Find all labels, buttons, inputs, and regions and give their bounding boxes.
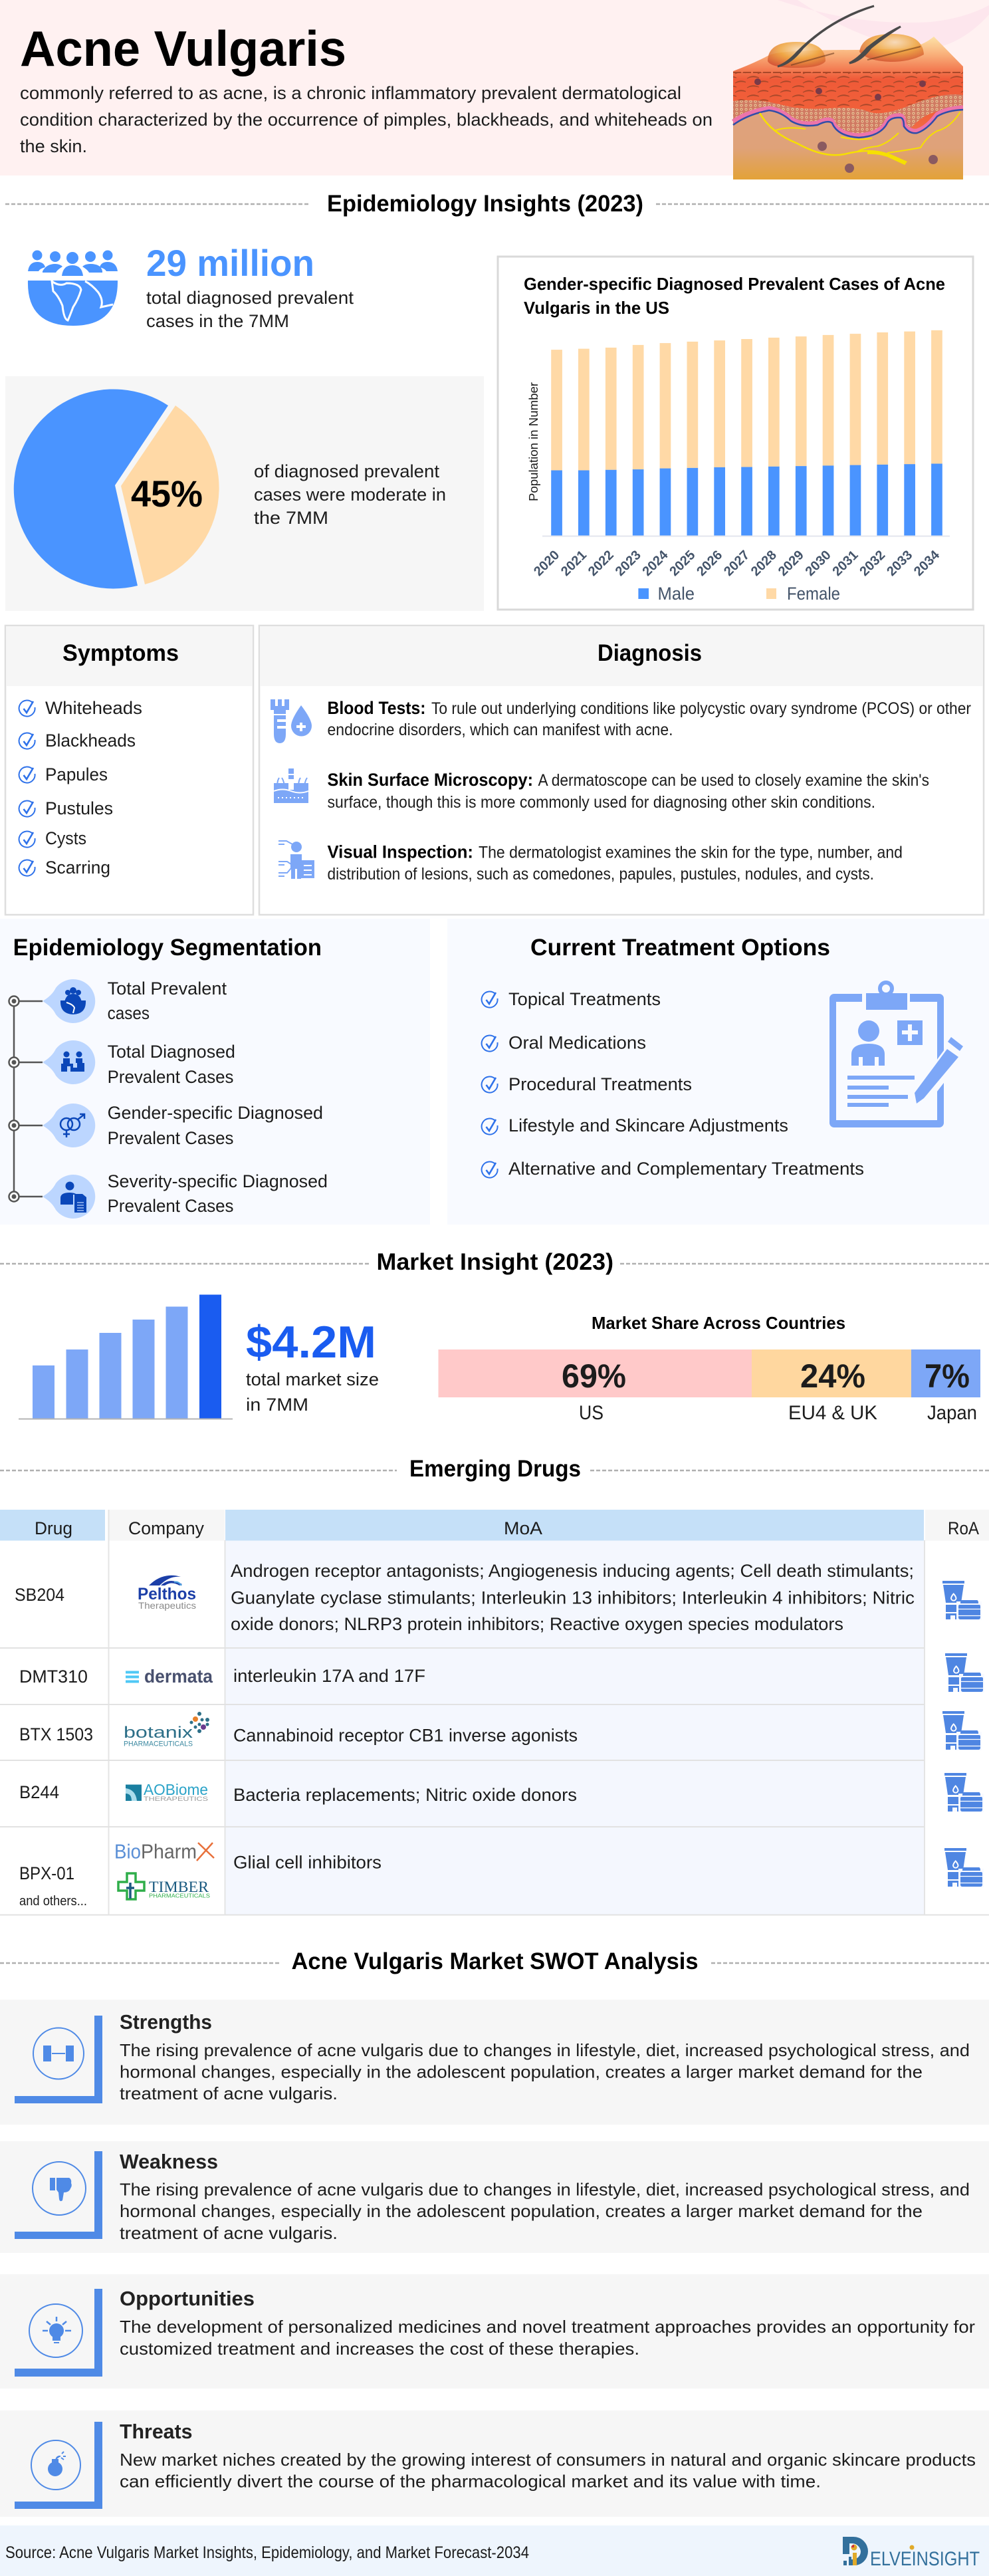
title: Acne Vulgaris [20,21,346,76]
chart: market share across countries: Market Share Across Countries [592,1313,845,1333]
segment: total diagnosed prevalent cases: Total Diagnosed [108,1042,235,1062]
segment: US [439,1349,752,1424]
row: B244 [19,1773,984,1812]
treatment list: Lifestyle and Skincare Adjustments [508,1115,788,1135]
icon: thumbs down [33,2162,86,2215]
table header [0,1510,989,1541]
segment: total prevalent cases [43,979,227,1023]
source note: Source: Acne Vulgaris Market Insights, Epidemiology, and Market Forecast-2034 [5,2543,529,2562]
chart title: Gender-specific Diagnosed Prevalent Cases of Acne [524,274,945,294]
heading: Epidemiology Insights (2023): Epidemiology Insights (2023) [327,191,643,217]
threats text: New market niches created by the growing interest of consumers in natural and organic skincare products [120,2450,976,2470]
strengths text [120,2010,970,2103]
row: DMT310: interleukin 17A and 17F [233,1666,425,1686]
logo: Timber Pharmaceuticals: TIMBER [149,1879,209,1895]
visual inspection text: The dermatologist examines the skin for the type, number, and [479,843,903,862]
chart: market growth bars [19,1295,233,1419]
table: emerging drugs [0,1510,989,1915]
heading: Emerging Drugs: Emerging Drugs [409,1456,581,1482]
row: SB204: SB204 [15,1585,64,1605]
x axis years: 2033 [884,548,915,579]
strengths text: Strengths [120,2010,212,2034]
icon: people on globe [28,250,118,326]
row: B244: B244 [19,1782,59,1802]
weakness text: treatment of acne vulgaris. [120,2223,338,2243]
icon: dumbbell [33,2028,84,2079]
panel: current treatment options [447,919,989,1225]
icon: light bulb [29,2304,82,2357]
row: BPX-01: BPX-01 [19,1863,74,1883]
logo: Pelthos Therapeutics: Pelthos [138,1585,196,1603]
stat: market size: in 7MM [246,1395,308,1415]
opportunities text: customized treatment and increases the cost of these therapies. [120,2339,639,2359]
treatment list: Topical Treatments [508,989,661,1009]
stat: market size [246,1317,379,1415]
segment: severity-specific diagnosed prevalent cases: Prevalent Cases [108,1196,234,1216]
pie chart: 45% [131,473,203,515]
segment: US: 69% [562,1357,626,1395]
pie chart [14,389,219,588]
logo: botanix: PHARMACEUTICALS [124,1740,193,1748]
segment: EU4 and UK: 24% [800,1357,865,1395]
treatment list [482,989,864,1179]
x axis years: 2030 [803,548,834,579]
logo: dermata: dermata [144,1666,213,1687]
logo: DelveInsight [843,2537,980,2570]
icon: dermatologist with checklist [278,841,314,879]
timeline connector [9,996,43,1202]
segment: total prevalent cases: cases [108,1003,150,1023]
chart title: Vulgaris in the US [524,298,669,318]
strengths text: treatment of acne vulgaris. [120,2083,338,2103]
row: SB204 [15,1561,982,1634]
opportunities text: Opportunities [120,2287,255,2310]
symptoms list: Whiteheads [45,698,142,718]
symptoms list: Pustules [45,798,113,818]
intro text: commonly referred to as acne, is a chronic inflammatory prevalent dermatological [20,83,681,103]
segment: severity-specific diagnosed prevalent cases [43,1171,328,1219]
panel: diagnosis [259,626,984,915]
intro text: the skin. [20,136,87,156]
stat: 29 million [28,242,354,331]
row: SB204: Guanylate cyclase stimulants; Interleukin 13 inhibitors; Interleukin 4 inhibitors; Nitric [231,1587,915,1607]
segmentation heading: Epidemiology Segmentation [13,935,322,961]
x axis years: 2027 [721,548,752,579]
x axis years: 2025 [667,548,698,579]
y axis label: Population in Number [527,382,540,501]
x axis years: 2020 [531,548,562,579]
visual inspection text: Visual Inspection: [327,842,473,862]
visual inspection text [327,842,903,883]
x axis years: 2021 [558,548,590,579]
footer [0,2525,989,2576]
row: SB204: oxide donors; NLRP3 protein inhibitors; Reactive oxygen species modulators [231,1614,843,1634]
weakness text [120,2150,970,2243]
legend: Male [658,584,695,604]
stat: 29 million: 29 million [146,242,314,284]
weakness text: The rising prevalence of acne vulgaris due to changes in lifestyle, diet, increased psychological stress, and [120,2180,970,2200]
row: SB204: Androgen receptor antagonists; Angiogenesis inducing agents; Cell death stimulants; [231,1561,914,1581]
segment: gender-specific diagnosed prevalent cases [43,1103,323,1148]
symptoms list: Cysts [45,828,86,848]
pie caption [254,461,446,528]
pie caption: of diagnosed prevalent [254,461,439,481]
intro text: condition characterized by the occurrence of pimples, blackheads, and whiteheads on [20,110,713,130]
x axis years: 2023 [613,548,644,579]
row: B244: Bacteria replacements; Nitric oxide donors [233,1785,577,1805]
table header: Drug [35,1518,72,1538]
symptoms list: Scarring [45,858,110,878]
logo: AOBiome Therapeutics: THERAPEUTICS [144,1796,208,1802]
row: BPX-01 [19,1840,984,1909]
segment: total diagnosed prevalent cases [43,1040,235,1087]
logo: Timber Pharmaceuticals [118,1873,210,1899]
heading: Market Insight (2023): Market Insight (2023) [376,1249,613,1275]
segment: gender-specific diagnosed prevalent cases: Prevalent Cases [108,1128,234,1148]
blood tests text [327,698,971,739]
panel: moderate cases pie [5,376,484,611]
x axis years: 2029 [776,548,807,579]
x axis years: 2034 [911,547,943,579]
weakness text: Weakness [120,2150,218,2173]
row: BTX 1503: BTX 1503 [19,1724,93,1744]
logo: Timber Pharmaceuticals: PHARMACEUTICALS [149,1893,210,1899]
blood tests text: endocrine disorders, which can manifest with acne. [327,721,673,739]
panel: opportunities [0,2274,989,2389]
logo: AOBiome Therapeutics: AOBiome [144,1781,208,1798]
segment: US: US [579,1402,604,1424]
x axis years: 2022 [586,548,617,579]
heading: SWOT analysis: Acne Vulgaris Market SWOT Analysis [291,1948,698,1974]
skin surface microscopy text: surface, though this is more commonly used for diagnosing other skin conditions. [327,793,875,812]
row: BTX 1503 [19,1711,982,1750]
logo: botanix [124,1712,209,1748]
symptoms list: Papules [45,764,108,784]
logo: Pelthos Therapeutics [138,1576,196,1611]
segment: EU4 and UK: EU4 & UK [788,1402,877,1424]
x axis years: 2031 [830,548,861,579]
treatment heading: Current Treatment Options [530,935,830,961]
chart title [524,274,945,318]
diagnosis heading: Diagnosis [598,640,702,666]
table header: Company [128,1518,204,1538]
weakness text: hormonal changes, especially in the adolescent population, creates a larger market demand for the [120,2201,923,2221]
logo: botanix: botanix [124,1724,193,1742]
threats text: Threats [120,2420,193,2443]
strengths text: The rising prevalence of acne vulgaris due to changes in lifestyle, diet, increased psychological stress, and [120,2040,970,2060]
row: BPX-01: and others... [19,1894,87,1909]
x axis years: 2026 [694,548,725,579]
illustration: skin cross-section with acne [733,6,963,179]
blood tests text: Blood Tests: [327,698,425,718]
segment: Japan: 7% [925,1357,970,1395]
pie caption: cases were moderate in [254,485,446,505]
segment: Japan: Japan [927,1402,977,1424]
panel: threats [0,2410,989,2517]
symptoms heading: Symptoms [62,640,179,666]
icon: skin microscopy [274,768,308,803]
segment: total prevalent cases: Total Prevalent [108,979,227,998]
x axis years: 2032 [857,548,888,579]
row: DMT310: DMT310 [19,1667,88,1687]
panel: weakness [0,2141,989,2253]
treatment list: Procedural Treatments [508,1074,692,1094]
opportunities text: The development of personalized medicines and novel treatment approaches provides an opportunity for [120,2317,975,2337]
legend: Female [787,584,840,604]
logo: BioPharmX: Pharm [141,1840,197,1863]
stat: 29 million: total diagnosed prevalent [146,288,354,308]
legend [638,584,840,604]
x axis years: 2028 [748,548,780,579]
threats text: can efficiently divert the course of the pharmacological market and its value with time. [120,2472,821,2492]
treatment list: Alternative and Complementary Treatments [508,1159,864,1179]
icon: clipboard with patient and pencil [829,983,964,1127]
symptoms list: Blackheads [45,731,136,751]
skin surface microscopy text: Skin Surface Microscopy: [327,770,533,790]
logo: AOBiome Therapeutics [126,1781,208,1802]
segment: gender-specific diagnosed prevalent cases: Gender-specific Diagnosed [108,1103,323,1123]
logo: Pelthos Therapeutics: Therapeutics [138,1600,196,1611]
panel: epidemiology segmentation [0,919,430,1225]
segment: EU4 and UK [752,1349,911,1424]
segment: total diagnosed prevalent cases: Prevalent Cases [108,1067,234,1087]
stacked bars [542,330,950,536]
symptoms list [19,698,142,878]
x axis years [531,547,943,579]
table header: MoA [504,1518,542,1538]
strengths text: hormonal changes, especially in the adolescent population, creates a larger market demand for the [120,2062,923,2082]
panel: strengths [0,2000,989,2125]
chart: market share across countries [439,1313,980,1424]
logo: BioPharmX: Bio [114,1840,141,1863]
skin surface microscopy text: A dermatoscope can be used to closely examine the skin's [538,771,929,790]
intro text [20,83,713,156]
icon: test tube and blood drop [271,699,312,743]
panel: gender-specific bar chart [498,257,973,610]
segment: Japan [911,1349,980,1424]
row: BPX-01: Glial cell inhibitors [233,1852,382,1872]
icon: bomb [31,2440,80,2490]
panel: symptoms [5,626,253,915]
row: DMT310 [19,1653,984,1693]
segment: severity-specific diagnosed prevalent cases: Severity-specific Diagnosed [108,1171,328,1191]
stat: market size: $4.2M [246,1317,376,1367]
pie caption: the 7MM [254,508,328,528]
x axis years: 2024 [640,547,671,579]
visual inspection text: distribution of lesions, such as comedones, papules, pustules, nodules, and cysts. [327,865,874,883]
header banner [0,0,989,176]
threats text [120,2420,976,2492]
treatment list: Oral Medications [508,1033,646,1053]
logo: BioPharmX [114,1840,214,1863]
table header: RoA [948,1518,979,1538]
stat: 29 million: cases in the 7MM [146,311,289,331]
skin surface microscopy text [327,770,929,812]
opportunities text [120,2287,975,2359]
row: BTX 1503: Cannabinoid receptor CB1 inverse agonists [233,1726,578,1746]
stat: market size: total market size [246,1369,379,1389]
